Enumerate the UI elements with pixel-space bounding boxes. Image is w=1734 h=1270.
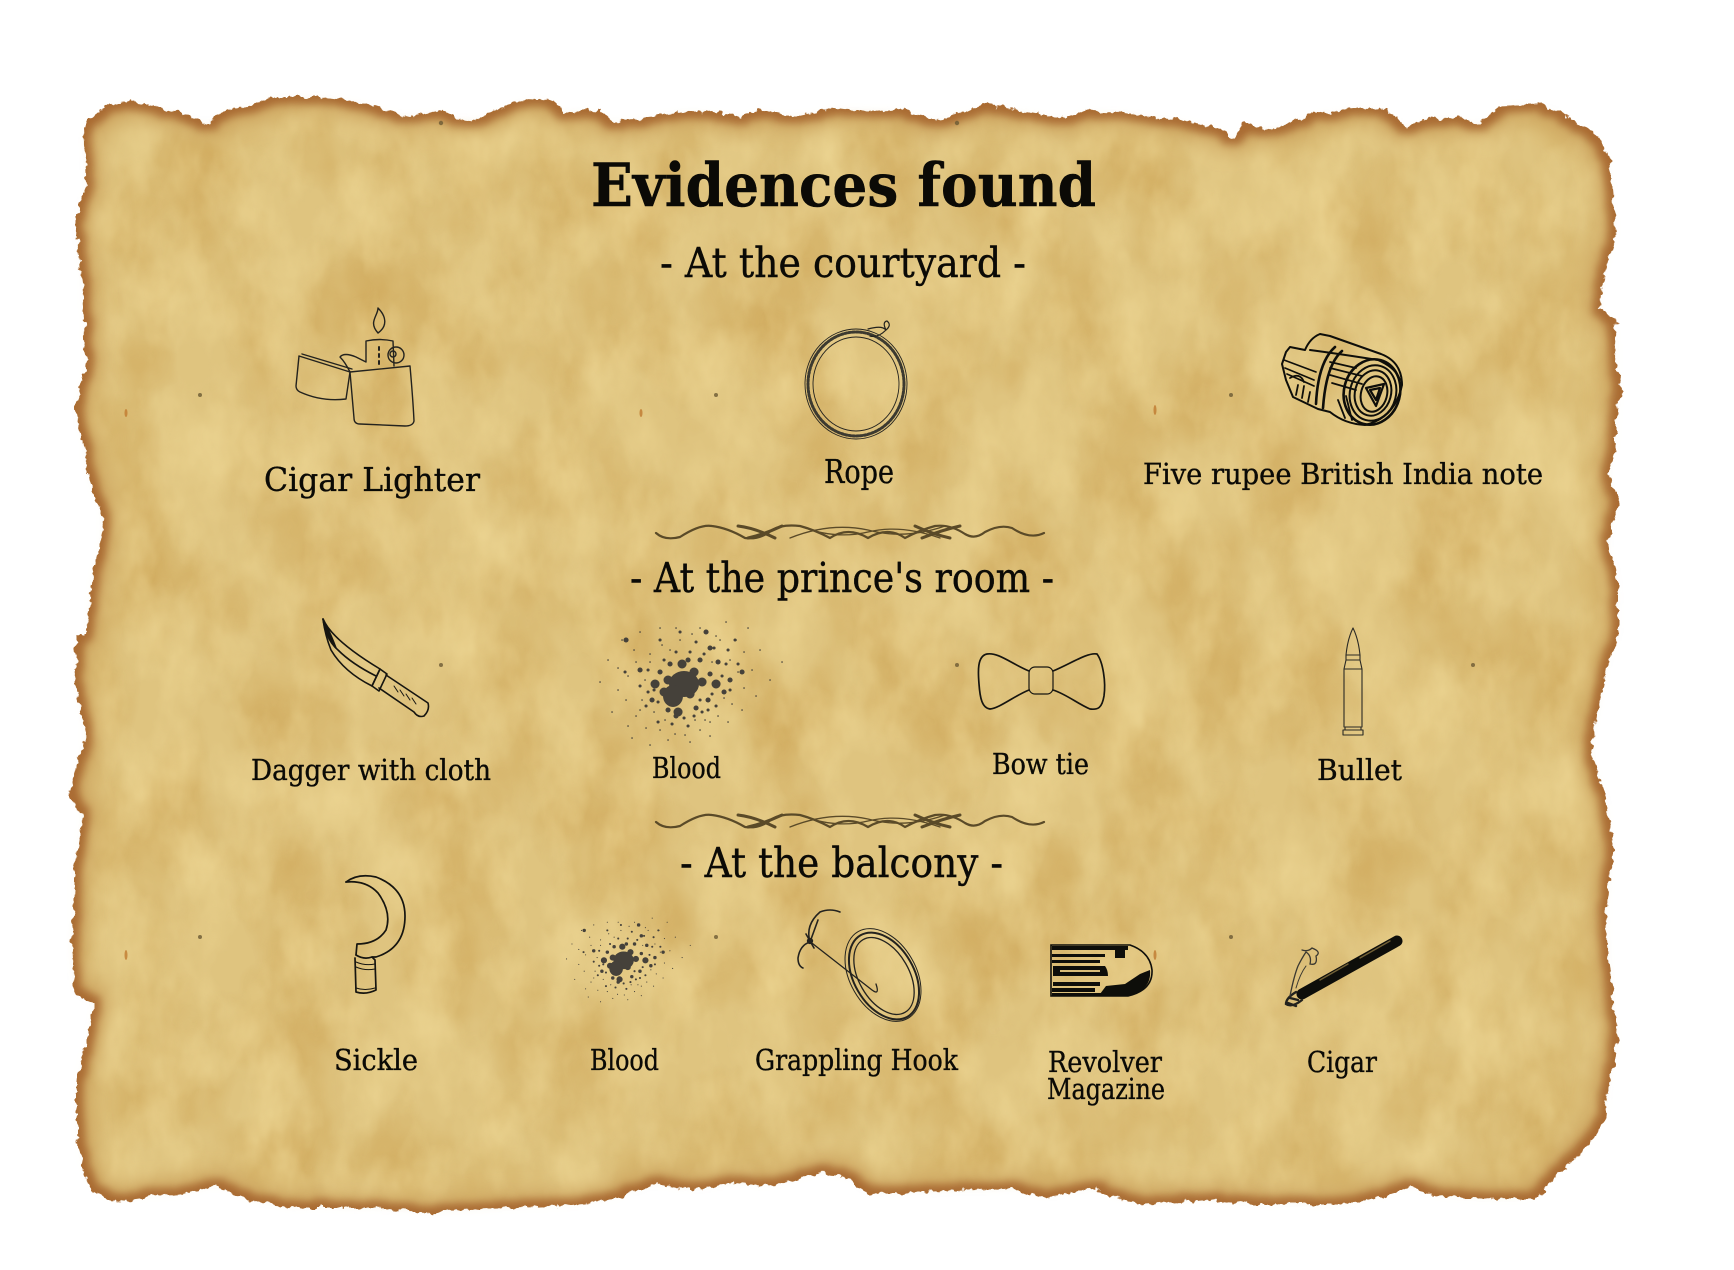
- section heading: prince's room: - At the prince's room -: [630, 554, 1054, 602]
- label: Dagger with cloth: [251, 753, 491, 787]
- item: bullet: [1317, 628, 1402, 787]
- item: rupee note: [1143, 334, 1543, 491]
- item: cigar lighter: [264, 308, 480, 499]
- label: Blood: [652, 751, 721, 785]
- icon: bow tie: [978, 654, 1105, 709]
- icon: rolled banknote: [1282, 334, 1408, 431]
- icon: cigar with smoke: [1286, 941, 1397, 1006]
- icon: rope coil: [805, 321, 907, 439]
- panel: parchment sheet: [69, 97, 1622, 1212]
- label: Revolver: [1048, 1045, 1162, 1079]
- item: sickle: [334, 876, 418, 1077]
- section heading: balcony: - At the balcony -: [680, 839, 1003, 887]
- icon: lighter: [296, 308, 414, 426]
- label: Cigar Lighter: [264, 460, 480, 499]
- label: Magazine: [1047, 1072, 1165, 1106]
- item: rope: [805, 321, 907, 491]
- icon: dagger: [323, 619, 428, 716]
- label: Grappling Hook: [755, 1043, 958, 1077]
- label: Sickle: [334, 1043, 418, 1077]
- label: Rope: [824, 452, 894, 491]
- divider ornament 2: [656, 814, 1044, 827]
- label: Cigar: [1307, 1045, 1377, 1079]
- title: Evidences found: [591, 151, 1096, 221]
- icon: blood splatter: [600, 622, 782, 745]
- icon: magazine: [1051, 945, 1152, 996]
- icon: blood splatter small: [566, 918, 690, 1002]
- item: dagger: [251, 619, 491, 787]
- label: Blood: [590, 1043, 659, 1077]
- label: Bullet: [1317, 753, 1402, 787]
- label: Bow tie: [992, 747, 1089, 781]
- item: bow tie: [978, 654, 1105, 781]
- icon: grappling hook with rope: [798, 910, 937, 1035]
- paper specks: [124, 121, 1475, 960]
- item: blood 2: [566, 918, 690, 1077]
- divider ornament 1: [656, 526, 1044, 538]
- item: blood: [600, 622, 782, 785]
- icon: sickle: [346, 876, 405, 993]
- icon: bullet: [1343, 628, 1363, 735]
- section heading: courtyard: - At the courtyard -: [660, 239, 1026, 287]
- label: Five rupee British India note: [1143, 457, 1543, 491]
- label: [1047, 1045, 1165, 1106]
- item: revolver magazine: [1047, 945, 1165, 1106]
- item: cigar: [1286, 941, 1397, 1079]
- item: grappling hook: [755, 910, 958, 1077]
